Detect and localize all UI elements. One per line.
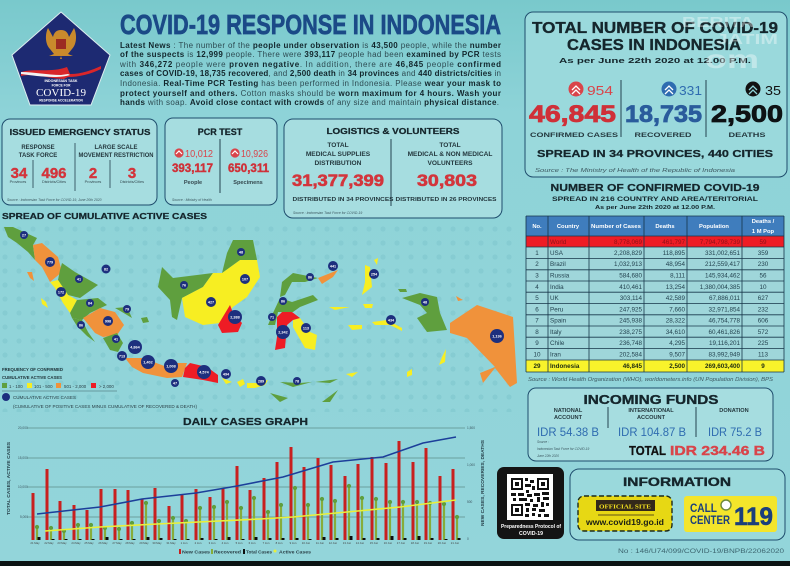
table rows: countries: 245,938 (619, 318, 642, 324)
map legend: 501 - 2,000 (64, 384, 87, 389)
table rows: countries: 4,295 (669, 340, 685, 347)
left axis labels: 1,500 (467, 426, 475, 430)
table rows: countries: 1 (535, 250, 539, 257)
date labels: 10 Jun (302, 541, 311, 545)
table rows: countries: 46,754,778 (708, 318, 740, 324)
panel: information (570, 469, 785, 540)
call center badge: CALL (690, 501, 717, 515)
date labels: 7 Jun (263, 541, 270, 545)
stat: response task force: 2 (89, 165, 97, 182)
latest news text block: Latest News : The number of the people under observation is 43,500 people, while the number (120, 41, 501, 50)
map legend (2, 367, 198, 409)
panel: incoming funds: DONATION (719, 408, 749, 414)
panel: PCR test: 650,311 (228, 161, 269, 175)
stat: fund amounts (537, 427, 762, 439)
date labels: 26 May (98, 541, 108, 545)
table rows: countries: 3 (535, 272, 539, 280)
map: active case markers: 47 (173, 382, 177, 386)
stat: recovered (625, 82, 702, 139)
table row: Indonesia: 29 (533, 363, 541, 370)
stat: response task force: 3 (128, 165, 136, 182)
table rows: countries (533, 250, 769, 358)
official site badge: OFFICIAL SITE (599, 504, 652, 510)
table rows: countries: 584,680 (619, 272, 642, 280)
table rows: countries: USA (550, 250, 564, 257)
panel: PCR test: People (184, 180, 202, 186)
logo: national COVID-19 task force: COVID-19 (36, 88, 86, 99)
panel: issued emergency status: Source : Indonesian Task Force for COVID-19, June 20th 2020 (7, 198, 102, 202)
stat: confirmed cases: 954 (587, 84, 613, 98)
map: Sumatra (4, 227, 149, 352)
panel: PCR test: Specimens (233, 180, 263, 186)
panel: logistics and volunteers: 31,377,399 (292, 171, 384, 190)
table rows: countries: 28,322 (666, 318, 685, 324)
date labels: 6 Jun (249, 541, 256, 545)
map legend: > 2,000 (99, 384, 114, 389)
panel: logistics and volunteers: TOTAL (327, 142, 349, 149)
table rows: countries: 4 (535, 284, 539, 291)
stat: confirmed cases: 46,845 (529, 101, 616, 128)
heading: logistics: LOGISTICS & VOLUNTEERS (326, 126, 460, 136)
table rows: countries: 236,748 (619, 340, 642, 347)
panel: logistics and volunteers: 30,803 (417, 171, 477, 190)
chart: daily cases (6, 426, 485, 554)
heading: daily cases graph: DAILY CASES GRAPH (183, 417, 308, 428)
map: active case markers: 254 (371, 272, 378, 276)
panel: logistics and volunteers: DISTRIBUTION (315, 160, 362, 167)
date labels: 19 Jun (424, 541, 433, 545)
stat: recovered: 331 (679, 84, 702, 98)
panel: PCR test (165, 118, 277, 205)
table rows: countries: 225 (758, 340, 769, 347)
black bars: deaths (39, 536, 459, 540)
table row: world: 461,797 (662, 239, 685, 246)
table rows: countries: 303,114 (620, 295, 642, 302)
table rows: countries: 19,116,201 (709, 340, 740, 347)
table rows: countries: 232 (758, 306, 769, 314)
map: active case markers: 41 (114, 338, 118, 342)
table rows: countries: Brazil (550, 261, 566, 268)
table rows: countries: 9 (535, 340, 539, 347)
chart legend: New Cases (182, 550, 211, 554)
stat: recovered: 18,735 (625, 101, 702, 128)
map: active case markers: 48 (239, 250, 243, 254)
map legend: 1 - 100 (9, 384, 23, 389)
latest news text block (119, 41, 501, 107)
table header: No. (532, 224, 542, 230)
latest news text block: cases of COVID-19, 18,735 recovered, and 2,500 death in 34 provinces and 440 districts/cities in (120, 69, 501, 78)
stat: recovered: RECOVERED (634, 132, 692, 139)
heading: number of confirmed COVID-19: SPREAD IN 216 COUNTRY AND AREA/TERITORIAL (552, 196, 758, 203)
QR code card: COVID-19 (519, 531, 543, 537)
date labels: 5 Jun (236, 541, 243, 545)
map: active case markers: 441 (330, 264, 336, 268)
panel: incoming funds: NATIONAL (554, 408, 583, 414)
date labels: 3 Jun (209, 541, 216, 545)
map: active case markers: 76 (182, 284, 186, 288)
map: Java and Nusa Tenggara (125, 358, 358, 402)
official site badge: www.covid19.go.id (585, 518, 664, 527)
table row: Indonesia: 2,500 (669, 363, 685, 370)
table rows: countries: 1,032,913 (614, 261, 642, 268)
logo: national COVID-19 task force: RESPONSE ACCELERATION (39, 98, 83, 102)
map: active case markers: 998 (105, 320, 111, 324)
panel: incoming funds (528, 388, 773, 461)
map: active case markers: 713 (119, 354, 125, 358)
stat: deaths: DEATHS (728, 132, 766, 139)
panel: issued emergency status (2, 119, 157, 205)
date labels: 14 Jun (356, 541, 365, 545)
table rows: countries: 202,584 (619, 352, 642, 358)
date labels: 13 Jun (343, 541, 352, 545)
map: active case markers: 71 (270, 316, 274, 320)
left axis labels: 10,000 (18, 485, 28, 489)
panel: logistics and volunteers (284, 119, 502, 218)
date labels: 12 Jun (329, 541, 338, 545)
stat: deaths (711, 82, 783, 139)
left axis labels: 15,000 (18, 456, 28, 460)
table row: Indonesia: Indonesia (550, 363, 580, 370)
panel: total number of cases: Source : The Ministry of Health of the Republic of Indonesia (535, 168, 735, 174)
map: Kalimantan (158, 240, 260, 333)
date labels (30, 541, 460, 545)
red bars: new cases (33, 441, 453, 540)
table rows: countries: 627 (758, 295, 769, 302)
map legend: 101 - 500 (34, 384, 53, 389)
table row: Indonesia: 9 (761, 363, 765, 370)
table header: Country (557, 224, 580, 230)
panel: incoming funds: Indonesian Task Force for COVID-19 (537, 447, 590, 451)
table rows: countries: 247,925 (619, 306, 642, 314)
table rows: countries: 9,507 (669, 352, 685, 358)
table row: Indonesia: 269,603,400 (705, 363, 740, 370)
call center badge (684, 496, 777, 532)
table rows: countries: 8,111 (670, 272, 685, 280)
heading: number of confirmed COVID-19 (550, 182, 760, 211)
table rows: countries: 56 (759, 272, 767, 280)
table row: Indonesia (533, 363, 765, 370)
date labels: 4 Jun (222, 541, 229, 545)
logo: national COVID-19 task force (12, 12, 110, 105)
date labels: 8 Jun (276, 541, 283, 545)
watermark: BERITA (682, 14, 754, 31)
date labels: 1 Jun (181, 541, 188, 545)
callout: spread in provinces: SPREAD IN 34 PROVINCES, 440 CITIES (537, 149, 773, 160)
panel: total number of cases (525, 12, 787, 177)
map: active case markers: 2,342 (278, 330, 288, 334)
table header: Deaths (655, 224, 675, 230)
table rows: countries: 113 (758, 352, 769, 358)
map: active case markers: 4,574 (199, 370, 210, 374)
heading: number of confirmed COVID-19: As per June 22th 2020 at 12.00 P.M. (595, 205, 716, 211)
table rows: countries: 145,934,462 (705, 272, 740, 280)
table rows: countries: 34,610 (666, 329, 685, 336)
panel: issued emergency status: Provinces (85, 180, 101, 184)
table row: world: 7,794,798,739 (700, 239, 740, 246)
panel: incoming funds: INTERNATIONAL (628, 408, 674, 414)
latest news text block: of the suspects is 12,999 people. There were 393,117 people had been examined by PCR tests (120, 50, 501, 59)
map: active case markers: 1,136 (492, 334, 502, 338)
table rows: countries: 6 (535, 306, 539, 314)
table rows: countries: 1,380,004,385 (700, 284, 740, 291)
date labels: 9 Jun (290, 541, 297, 545)
panel: logistics and volunteers: MEDICAL & NON MEDICAL (408, 151, 492, 158)
QR code card (497, 467, 564, 539)
panel: PCR test: 393,117 (172, 161, 213, 175)
date labels: 28 May (125, 541, 135, 545)
heading: emergency status: ISSUED EMERGENCY STATUS (10, 127, 151, 137)
table rows: countries: 410,461 (619, 284, 642, 291)
watermark: JATIM (716, 31, 778, 48)
logo: national COVID-19 task force: INDONESIAN TASK (44, 79, 78, 83)
table header: Population (699, 224, 729, 230)
call center badge: CENTER (690, 513, 730, 527)
chart legend: Active Cases (279, 550, 311, 554)
panel: logistics and volunteers: VOLUNTEERS (427, 160, 473, 167)
map: active case markers: 434 (388, 318, 395, 322)
table rows: countries: 13,254 (666, 284, 685, 291)
panel: PCR test: 10,012 (185, 149, 213, 160)
stat: fund amounts: IDR 54.38 B (537, 427, 599, 439)
left axis labels (18, 426, 475, 541)
map: active case markers: 1,402 (143, 360, 153, 364)
stat: total funds: TOTAL (629, 443, 666, 458)
stat: deaths: 35 (765, 84, 781, 98)
table rows: countries: 606 (758, 318, 769, 324)
table: confirmed cases by country (526, 216, 784, 372)
map: active case markers: 4,864 (130, 346, 141, 350)
map: active case markers: 84 (88, 302, 93, 306)
call center badge: 119 (734, 503, 773, 531)
chart legend (179, 549, 311, 554)
map legend: (CUMULATIVE OF POSITIVE CASES MINUS CUMULATIVE OF RECOVERED & DEATH) (13, 404, 198, 409)
map: active case markers: 27 (22, 234, 26, 238)
watermark (682, 14, 778, 74)
panel: issued emergency status: RESPONSE (21, 145, 55, 151)
table rows: countries: Peru (550, 306, 564, 314)
official site badge (578, 496, 672, 531)
stat: fund amounts: IDR 75.2 B (708, 427, 762, 439)
panel: incoming funds: IDR 234.46 B (670, 443, 765, 458)
title: COVID-19 RESPONSE IN INDONESIA (120, 9, 501, 40)
map: active case markers: 48 (423, 300, 427, 304)
date labels: 2 Jun (195, 541, 202, 545)
stat: response task force: 496 (41, 165, 67, 182)
table rows: countries: Italy (550, 329, 562, 336)
latest news text block: hands with soap. Avoid close contact with crowds of any size and maintain physical distance. (120, 98, 499, 107)
panel: logistics and volunteers: Source : Indonesian Task Force for COVID-19 (293, 211, 362, 215)
left axis labels: 1,000 (467, 463, 475, 467)
green bars: recovered (37, 486, 457, 540)
latest news text block: with 346,272 people were proven negative. In addition, there are 46,845 people confirmed (119, 60, 501, 69)
panel: issued emergency status: Districts/Cities (42, 180, 66, 184)
panel: issued emergency status: MOVEMENT RESTRICTION (78, 153, 154, 159)
heading: spread of cumulative active cases: SPREAD OF CUMULATIVE ACTIVE CASES (2, 212, 208, 221)
date labels: 24 May (71, 541, 81, 545)
table rows: countries: UK (550, 295, 560, 302)
logo: national COVID-19 task force: FORCE FOR (52, 84, 71, 88)
table rows: countries: 118,895 (663, 250, 685, 257)
line: total cases (37, 437, 456, 514)
table row: world: 8,778,069 (614, 239, 642, 246)
map: active case markers: 86 (79, 324, 83, 328)
panel: incoming funds: Source : (537, 440, 549, 444)
line: active cases (45, 500, 456, 531)
map: active case markers: 41 (77, 278, 81, 282)
latest news text block: Indonesia. Real-Time PCR Testing has been performed in Indonesia. Please wear your mask to (120, 79, 501, 88)
panel: PCR test: 10,926 (241, 149, 268, 160)
map: active case markers: 494 (223, 372, 230, 376)
left axis labels: 5,000 (20, 515, 28, 519)
table row: world: 59 (759, 239, 767, 246)
map legend: CUMULATIVE ACTIVE CASES (13, 395, 76, 401)
table rows: countries: 572 (758, 329, 769, 336)
table header: 1 M Pop (752, 229, 775, 235)
date labels: 18 Jun (411, 541, 420, 545)
chart legend: Total Cases (246, 550, 272, 554)
table rows: countries: 230 (758, 261, 769, 268)
latest news text block: protect yourself and others. Cotton masks should be worn maximum for 4 hours. Wash your (120, 89, 501, 98)
map: active case markers: 107 (242, 278, 248, 282)
panel: logistics and volunteers: TOTAL (439, 142, 461, 149)
map legend: CUMULATIVE ACTIVE CASES (2, 375, 62, 380)
map: Papua (398, 289, 517, 387)
table rows: countries: India (550, 284, 564, 291)
map: active case markers (20, 231, 504, 387)
table rows: countries: 2,208,829 (614, 250, 642, 257)
stat: confirmed cases: CONFIRMED CASES (530, 132, 619, 139)
panel: total number of cases: CASES IN INDONESIA (567, 37, 741, 54)
map: active case markers: 86 (308, 276, 312, 280)
map: active case markers: 86 (281, 300, 285, 304)
map: active case markers: 779 (47, 260, 53, 264)
stat: fund amounts: IDR 104.87 B (618, 427, 686, 439)
table rows: countries: 32,971,854 (708, 306, 740, 314)
table rows: countries: 67,886,011 (709, 295, 740, 302)
table rows: countries: 212,559,417 (705, 261, 740, 268)
heading: PCR test: PCR TEST (198, 127, 243, 137)
stat: response task force: 34 (11, 165, 28, 182)
panel: issued emergency status: Districts/Cities (120, 180, 144, 184)
map: active case markers: 113 (303, 326, 309, 330)
table rows: countries: 2 (535, 261, 539, 268)
table rows: countries: 238,275 (619, 329, 642, 336)
date labels: 21 May (30, 541, 40, 545)
stat: confirmed cases (529, 82, 619, 139)
table rows: countries: 10 (759, 284, 767, 291)
map: active case markers: 79 (125, 308, 129, 312)
table rows: countries: 331,002,651 (705, 250, 740, 257)
date labels: 29 May (139, 541, 149, 545)
map: Maluku (329, 258, 446, 377)
table header: Number of Cases (591, 224, 641, 230)
table source: Source : World Health Organization (WHO), worldometers.info (UN Population Division), BPS (528, 377, 774, 383)
table row: world (550, 239, 767, 246)
left axis labels: 20,000 (18, 426, 28, 430)
table row: Indonesia: 46,845 (623, 363, 642, 370)
panel: issued emergency status: LARGE SCALE (94, 145, 138, 151)
map of Indonesia (4, 227, 517, 402)
map: active case markers: 78 (295, 380, 299, 384)
left axis labels: 0 (467, 537, 469, 541)
left axis labels: 500 (467, 500, 473, 504)
document number: No : 146/U74/099/COVID-19/BNPB/22062020 (618, 549, 785, 555)
date labels: 27 May (112, 541, 122, 545)
table rows: countries: Russia (550, 272, 570, 280)
table rows: countries: Iran (550, 352, 561, 358)
table rows: countries: 8 (535, 329, 539, 336)
panel: incoming funds: June 22th 2020 (537, 454, 559, 458)
table header: Deaths / (752, 219, 775, 225)
table rows: countries: 60,461,826 (708, 329, 740, 336)
date labels: 20 Jun (438, 541, 447, 545)
panel: logistics and volunteers: DISTRIBUTED IN 34 PROVINCES (292, 197, 394, 203)
panel: incoming funds: ACCOUNT (554, 415, 583, 421)
panel: total number of cases: As per June 22th 2020 at 12.00 P.M. (559, 56, 751, 65)
date labels: 17 Jun (397, 541, 406, 545)
panel: logistics and volunteers: MEDICAL SUPPLIES (306, 151, 371, 158)
table rows: countries: 42,589 (666, 295, 685, 302)
table row: world: World (550, 239, 567, 246)
table rows: countries: 48,954 (666, 261, 685, 268)
panel: issued emergency status: TASK FORCE (19, 153, 57, 159)
date labels: 31 May (166, 541, 176, 545)
heading: incoming funds: INCOMING FUNDS (584, 392, 719, 407)
date labels: 16 Jun (384, 541, 393, 545)
heading: information: INFORMATION (623, 475, 731, 489)
date labels: 23 May (57, 541, 67, 545)
QR code card: Preparedness Protocol of (501, 524, 561, 530)
map: active case markers: 289 (258, 380, 264, 384)
table header (532, 219, 775, 235)
table rows: countries: 83,992,949 (708, 352, 740, 358)
date labels: 15 Jun (370, 541, 379, 545)
map: active case markers: 427 (208, 300, 214, 304)
panel: logistics and volunteers: DISTRIBUTED IN 26 PROVINCES (396, 197, 497, 203)
map: active case markers: 172 (58, 290, 64, 294)
date labels: 21 Jun (451, 541, 460, 545)
date labels: 22 May (44, 541, 54, 545)
table rows: countries: 7,660 (669, 306, 685, 314)
panel: issued emergency status: Provinces (10, 180, 26, 184)
stat: deaths: 2,500 (711, 101, 783, 128)
table rows: countries: 7 (535, 318, 539, 324)
map legend: FREQUENCY OF CONFIRMED (2, 367, 64, 372)
chart: daily cases: NEW CASES, RECOVERIES, DEATHS (480, 440, 485, 526)
heading: total number of COVID-19 cases: TOTAL NUMBER OF COVID-19 (532, 20, 778, 37)
chart: daily cases: TOTAL CASES, ACTIVE CASES (6, 442, 11, 515)
table rows: countries: Spain (550, 318, 567, 324)
date labels: 11 Jun (316, 541, 325, 545)
map: active case markers: 2,388 (230, 316, 240, 320)
map: active case markers: 1,008 (166, 364, 176, 368)
map: Sulawesi (268, 270, 338, 350)
table rows: countries: Chile (550, 340, 565, 347)
table rows: countries: 10 (533, 352, 541, 358)
date labels: 30 May (152, 541, 162, 545)
chart legend: Recovered (214, 550, 241, 554)
map: active case markers: 82 (104, 268, 108, 272)
panel: incoming funds: ACCOUNT (637, 415, 666, 421)
table rows: countries: 359 (758, 250, 769, 257)
watermark: om (705, 44, 759, 74)
table rows: countries: 5 (535, 295, 539, 302)
heading: number of confirmed COVID-19: NUMBER OF CONFIRMED COVID-19 (550, 182, 760, 194)
panel: PCR test: Source : Ministry of Health (172, 198, 212, 202)
date labels: 25 May (84, 541, 94, 545)
stat: response task force (11, 165, 136, 182)
